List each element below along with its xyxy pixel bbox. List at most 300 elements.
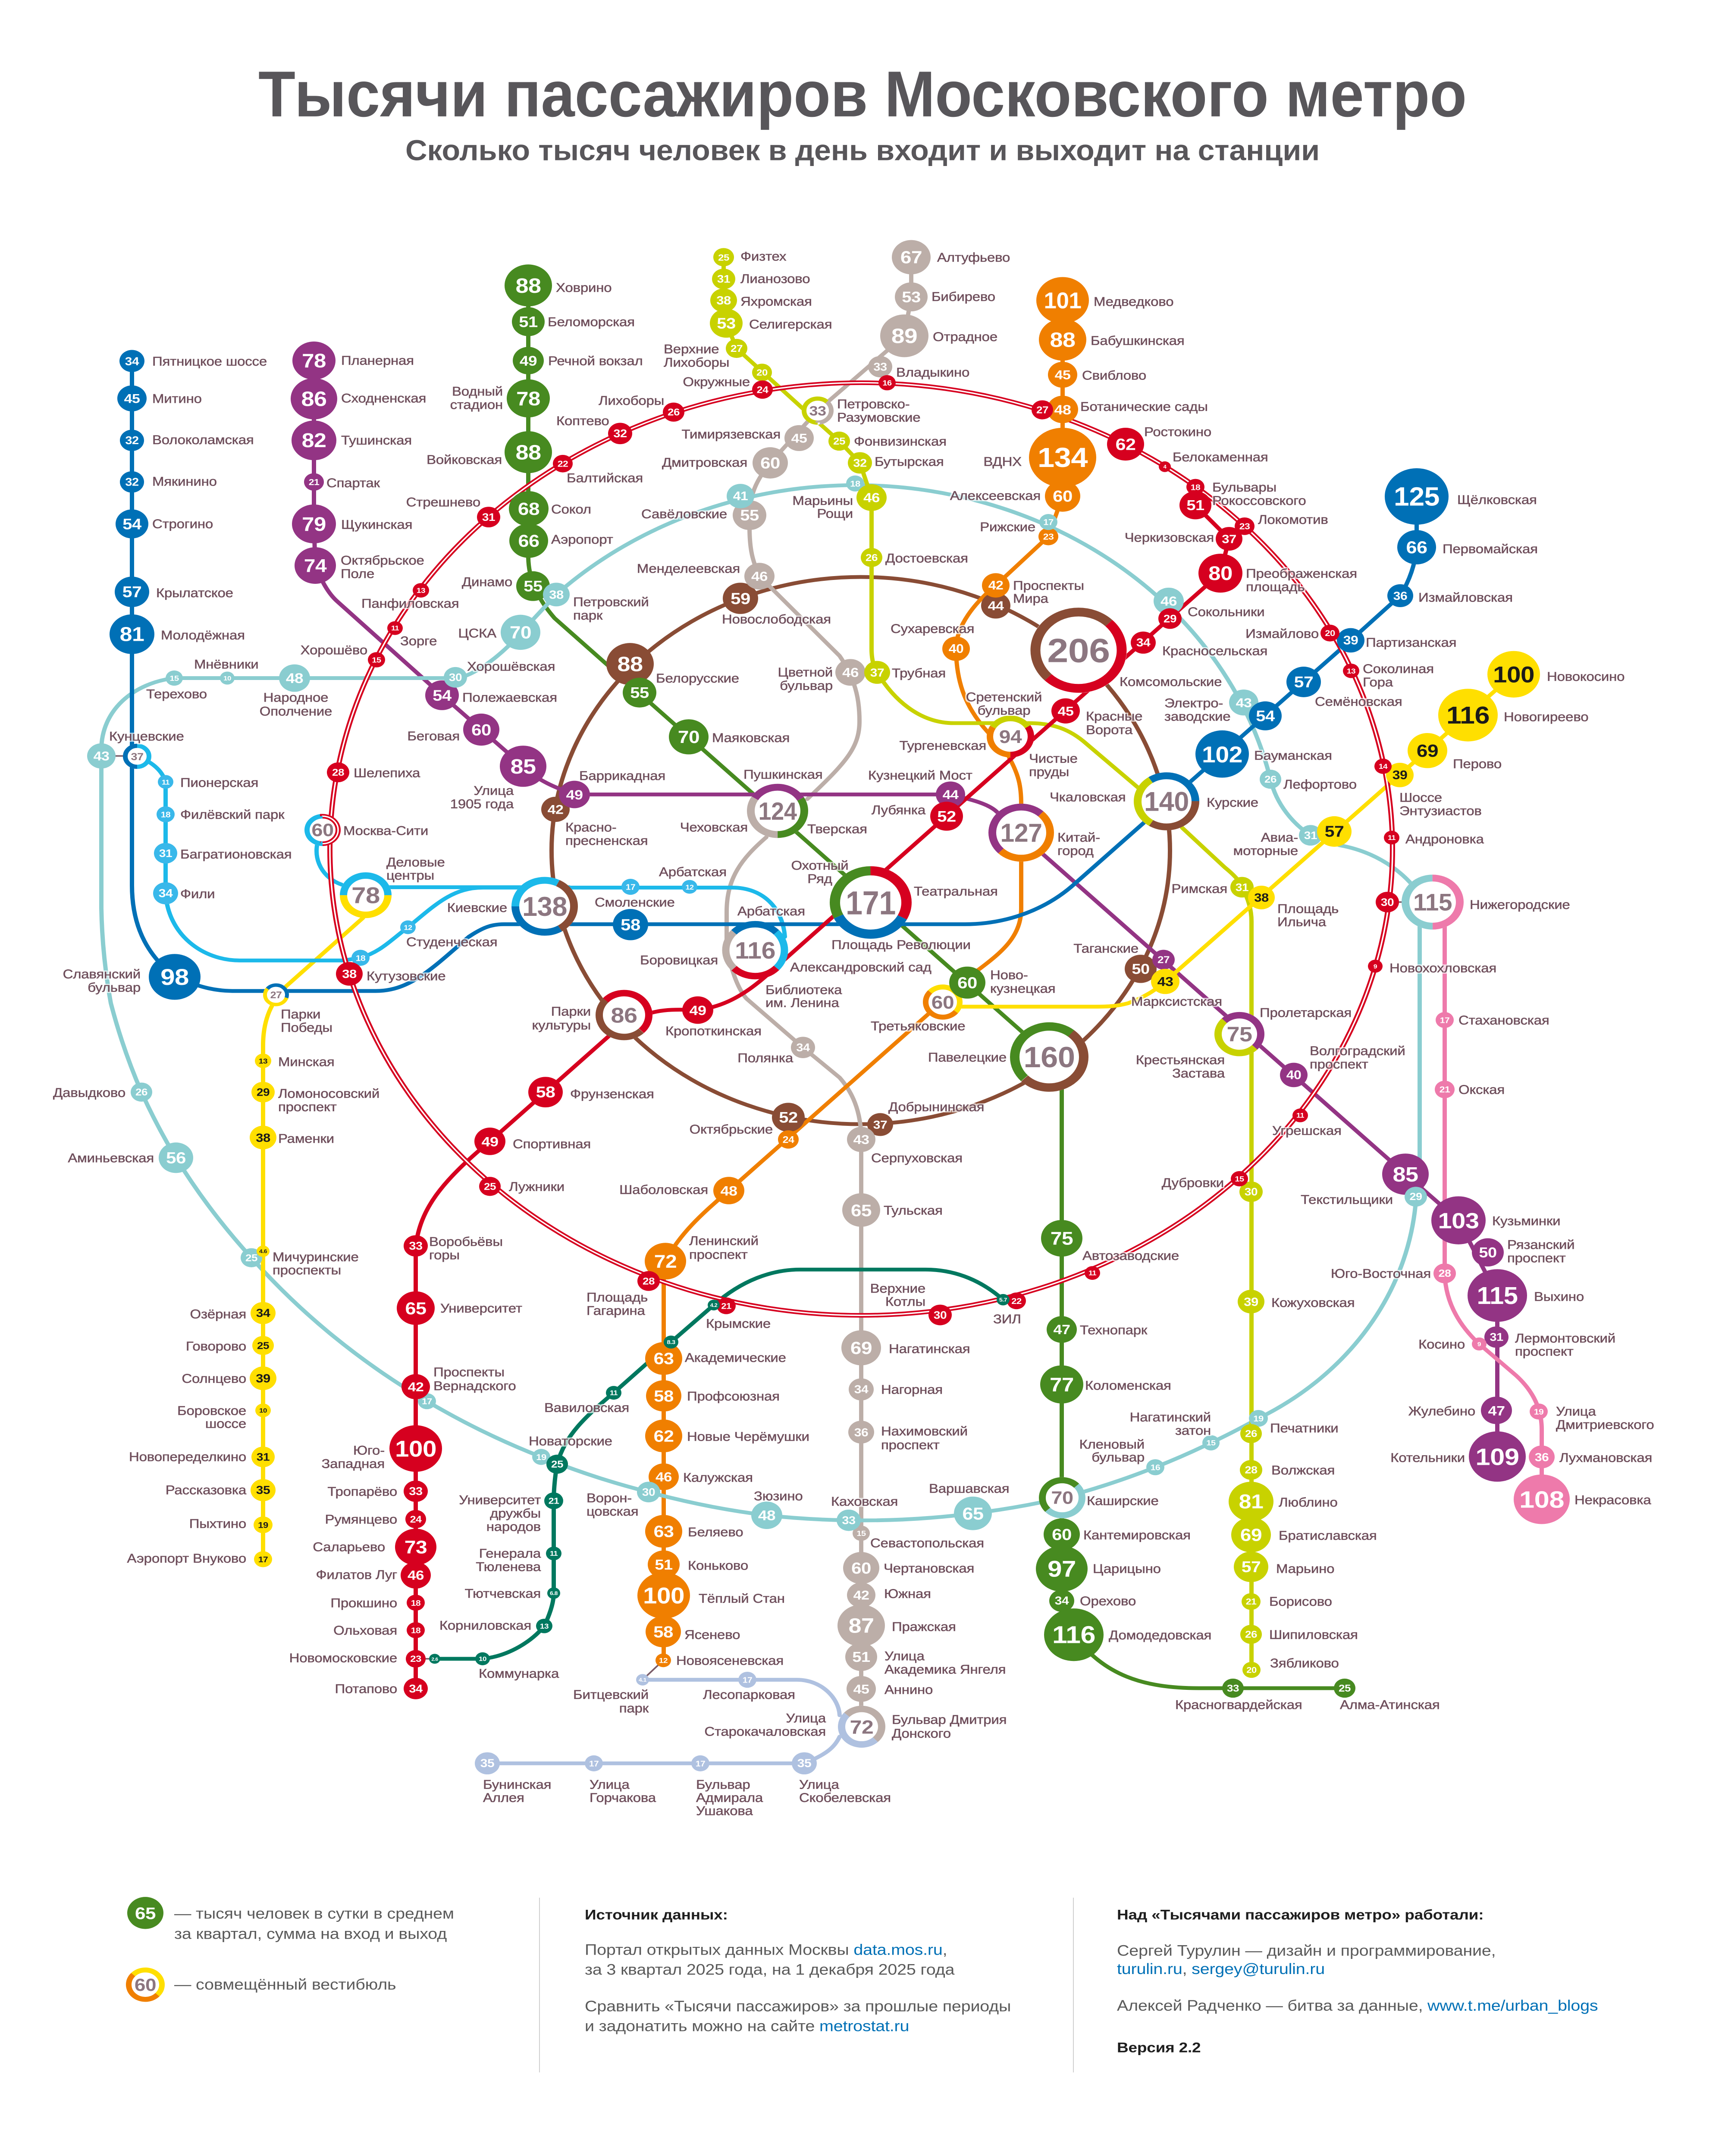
station: Арбатская Филёвская (659, 865, 727, 894)
station: Панфиловская: 13 (417, 586, 426, 595)
station: Румянцево (325, 1510, 426, 1528)
station: Рязанский проспект: проспект (1507, 1251, 1566, 1265)
station: Сухаревская: Сухаревская (891, 622, 974, 636)
station: Дубровка МЦК: 15 (1235, 1175, 1244, 1184)
station: Лермонтовский проспект: Лермонтовский (1515, 1331, 1615, 1345)
station: Генерала Тюленева (476, 1546, 561, 1574)
station: Улица Дмитриевского: Дмитриевского (1556, 1418, 1654, 1432)
station: Славянский бульвар: 98 (160, 965, 189, 990)
ring: Каширские (1039, 1477, 1159, 1518)
station: Новокосино: 100 (1493, 662, 1534, 687)
station: Потапово: Потапово (335, 1682, 397, 1696)
station: Окружная МЦК: 24 (757, 385, 768, 395)
station: Войковская: 88 (515, 441, 541, 464)
station: Бабушкинская (1039, 319, 1185, 360)
station: Перово: Перово (1453, 757, 1502, 771)
station: Нагатинский Затон: Нагатинский (1130, 1410, 1211, 1424)
station: Лефортово: Лефортово (1283, 777, 1357, 792)
station: Ясенево (646, 1616, 740, 1647)
station: Бауманская: Бауманская (1254, 749, 1332, 763)
station: Хорошёво: 15 (372, 656, 381, 664)
station: Рязанский проспект: 50 (1479, 1244, 1497, 1260)
station: Серпуховская: 43 (853, 1132, 869, 1147)
station: Бибирево (895, 282, 995, 311)
stations: Московское центральное кольцо (301, 375, 1496, 1331)
station: Окская (1435, 1081, 1505, 1098)
station: Авиамоторная БКЛ: 31 (1304, 830, 1317, 842)
station: Кузьминки (1431, 1196, 1560, 1244)
station: Ботанический сад МЦК (1032, 400, 1053, 420)
station: Люблино: Люблино (1279, 1495, 1338, 1509)
station: Академическая: 63 (654, 1349, 674, 1368)
station: Лужники: Лужники (509, 1180, 565, 1194)
station: Битцевский парк: 4.1 (639, 1677, 646, 1683)
station: Проспект Вернадского БКЛ (418, 1393, 436, 1409)
station: Котельники: 109 (1475, 1444, 1519, 1470)
station: Говорово (186, 1336, 274, 1355)
station: Цветной бульвар: Цветной (778, 665, 833, 680)
station: Аэропорт: Аэропорт (551, 533, 613, 547)
station: Вавиловская: 11 (610, 1389, 618, 1397)
station: Римская (1171, 877, 1254, 897)
station: Новокузнецкая: Ново- (990, 968, 1028, 982)
station: Корниловская: Корниловская (439, 1618, 531, 1633)
station: Алексеевская (950, 480, 1080, 512)
station: Панфиловская (361, 583, 459, 611)
station: Ломоносовский проспект (251, 1082, 380, 1114)
station: Маяковская (669, 719, 790, 755)
station: Партизанская: 39 (1343, 634, 1358, 647)
station: Народное Ополчение: 48 (286, 671, 303, 686)
station: Нахимовский проспект: 36 (854, 1426, 868, 1439)
station: Коломенская: 77 (1050, 1374, 1074, 1396)
stations: Таганско-Краснопресненская линия (291, 342, 1615, 1482)
station: Славянский бульвар (63, 954, 201, 1000)
station: Шипиловская: 26 (1245, 1630, 1257, 1640)
station: Улица Горчакова: Горчакова (590, 1791, 656, 1805)
ring: Москва-Сити: Москва-Сити (343, 824, 428, 838)
station: Смоленская Филёвская (621, 879, 640, 895)
station: Андроновка: Андроновка (1405, 832, 1484, 846)
station: Планерная: 78 (302, 350, 326, 372)
ring: Москва-Сити: 60 (311, 820, 334, 840)
line 11: Большая кольцевая (101, 485, 1420, 1520)
station: Коптево: Коптево (556, 414, 609, 428)
station: Воробьёвы горы: 33 (409, 1240, 423, 1252)
station: Владыкино: Владыкино (896, 365, 969, 379)
ring: Третьяковские: 60 (932, 992, 954, 1012)
station: Тушинская: Тушинская (341, 433, 412, 448)
ring: Китай-город: Китай- (1057, 830, 1100, 845)
station: Медведково (1036, 277, 1173, 323)
station: Кропоткинская (665, 997, 762, 1038)
station: Полежаевская: Полежаевская (462, 690, 557, 705)
interchange rings (109, 396, 1570, 1748)
station: Новокосино (1487, 651, 1625, 698)
station: Некрасовка: 108 (1519, 1487, 1564, 1513)
station: Боровское шоссе: Боровское (177, 1404, 246, 1418)
ring: Парки культуры (532, 990, 652, 1040)
station: Севастопольская: Севастопольская (870, 1536, 984, 1550)
station: Савёловская: 55 (740, 507, 759, 524)
station: Выхино: Выхино (1534, 1290, 1584, 1304)
station: Электрозаводская БКЛ: Электро- (1164, 696, 1223, 710)
station: Текстильщики БКЛ (1405, 1187, 1427, 1206)
station: Новогиреево: Новогиреево (1504, 710, 1588, 724)
station: Свиблово: 45 (1055, 367, 1070, 382)
station: Строгино (116, 509, 213, 539)
station: Молодёжная: 81 (120, 624, 144, 646)
station: Мичуринский проспект: 4.6 (259, 1248, 267, 1254)
station: Мнёвники: Мнёвники (194, 657, 258, 671)
station: Трубная: Трубная (892, 666, 946, 680)
station: Спортивная: Спортивная (513, 1137, 591, 1151)
station: Балтийская (553, 455, 643, 485)
text block: credits: Над «Тысячами пассажиров метро» работали: (1117, 1907, 1484, 1923)
station: Кожуховская: 39 (1244, 1296, 1258, 1309)
station: Текстильщики (1301, 1153, 1429, 1207)
label: Улица Старокачаловская: Улица (786, 1711, 826, 1725)
station: Потапово (335, 1678, 428, 1699)
ring: Китай-город (988, 804, 1100, 862)
station: Физтех: 25 (718, 252, 729, 263)
station: Молодёжная (110, 614, 245, 654)
station: Братиславская (1231, 1517, 1377, 1552)
station: Чертановская (843, 1552, 974, 1584)
station: Пионерская: Пионерская (180, 776, 258, 790)
station: Красные Ворота: Ворота (1086, 723, 1133, 737)
station: Улица 1905 года: Улица (474, 783, 514, 798)
station: Мичуринский проспект БКЛ: 25 (245, 1253, 257, 1263)
station: Марьина Роща: 46 (863, 490, 880, 505)
station: Лесопарковая: 17 (743, 1676, 753, 1685)
station: Белорусская зелёная: 55 (630, 685, 649, 702)
station: Шоссе Энтузиастов МЦК (1374, 758, 1392, 774)
ring: Курские: 140 (1144, 787, 1189, 817)
station: Новомосковская (289, 1650, 426, 1667)
station: Новые Черёмушки (645, 1420, 809, 1452)
station: Семёновская: 57 (1294, 674, 1313, 691)
station: Жулебино (1408, 1397, 1512, 1424)
station: Фонвизинская: Фонвизинская (854, 434, 947, 448)
ring: Кунцевские: 37 (131, 751, 144, 762)
station: Севастопольская (853, 1526, 984, 1550)
station: Беляево: 63 (654, 1522, 674, 1541)
station: Хорошёвская: 30 (449, 671, 462, 683)
station: Достоевская: 26 (866, 552, 878, 564)
station: Давыдково: 26 (135, 1087, 147, 1098)
station: Фонвизинская: 25 (833, 436, 845, 447)
line 5: Кольцевая (552, 577, 1170, 1124)
station: Сокольники БКЛ (1154, 588, 1184, 614)
station: Водный стадион (450, 379, 550, 417)
stations: Кольцевая линия (541, 583, 1157, 1137)
station: Шаболовская: Шаболовская (619, 1183, 708, 1197)
station: Калужская: Калужская (683, 1470, 753, 1485)
station: Кожуховская: Кожуховская (1271, 1296, 1355, 1310)
ring: Чистые пруды: пруды (1029, 765, 1069, 779)
station: Волжская (1240, 1460, 1335, 1480)
station: Воробьёвы горы: Воробьёвы (429, 1235, 503, 1249)
station: Окская: Окская (1458, 1083, 1505, 1097)
station: Прокшино: Прокшино (330, 1596, 397, 1610)
station: Войковская (427, 431, 552, 473)
station: Красногвардейская (1175, 1679, 1302, 1712)
station: Аннино: Аннино (884, 1683, 933, 1697)
station: Саларьево (313, 1529, 436, 1565)
ring: Курские (1050, 772, 1258, 830)
station: Котельники: Котельники (1390, 1451, 1465, 1465)
station: Пражская: 87 (848, 1614, 874, 1637)
station: Косино (1418, 1337, 1487, 1351)
station: Воронцовская: цовская (586, 1504, 638, 1519)
station: Кунцевская БКЛ: 43 (94, 749, 109, 763)
station: Угрешская (1272, 1109, 1342, 1138)
station: Алексеевская: 60 (1053, 488, 1073, 505)
station: Улица Академика Янгеля (845, 1643, 1006, 1677)
station: Яхромская (710, 288, 812, 312)
ring: Киевские: Киевские (447, 901, 507, 915)
station: Ботанические сады (1047, 396, 1208, 423)
station: Дмитровская: Дмитровская (662, 455, 747, 470)
station: Добрынинская (867, 1100, 984, 1136)
station: Алма-Атинская (1334, 1679, 1440, 1712)
station: Крылатское (115, 577, 233, 607)
station: Балтийская: Балтийская (567, 471, 643, 485)
station: Сходненская: Сходненская (341, 391, 426, 405)
station: Улица Горчакова: Улица (590, 1777, 630, 1792)
station: Коптево (556, 414, 632, 444)
station: Коптево: 32 (613, 427, 627, 440)
station: Зябликово: Зябликово (1270, 1656, 1339, 1670)
station: Лермонтовский проспект (1484, 1326, 1615, 1359)
ring: Чистые пруды: Сретенский (966, 690, 1042, 704)
station: Волгоградский проспект: 40 (1286, 1069, 1301, 1082)
ring: Деловые центры: 78 (351, 883, 380, 909)
ring: Комсомольские: 206 (1047, 632, 1110, 669)
station: Кутузовская МЦК: Кутузовские (367, 969, 445, 983)
station: Пыхтино: Пыхтино (189, 1517, 246, 1531)
station: Электрозаводская БКЛ (1164, 689, 1258, 724)
ring: Пушкинская: Тверская (807, 822, 867, 836)
station: Новослободская (722, 583, 831, 627)
ring: Крестьянская Застава: Застава (1172, 1066, 1225, 1081)
station: Краснопресненская (541, 797, 648, 848)
station: Улица Скобелевская: Скобелевская (799, 1791, 891, 1805)
line 10: Люблинско-Дмитровская (724, 257, 1251, 1670)
station: Орехово (1049, 1590, 1136, 1612)
text block: data source: Источник данных: (585, 1907, 728, 1923)
station: Волоколамская: 32 (125, 434, 139, 447)
station: Рязанский проспект (1472, 1238, 1574, 1266)
station: Саларьево: Саларьево (313, 1540, 385, 1554)
station: Лухмановская (1529, 1445, 1652, 1468)
station: Юго-Восточная: 28 (1438, 1268, 1451, 1279)
station: Вавиловская: Вавиловская (544, 1401, 629, 1415)
station: Тульская: Тульская (884, 1203, 943, 1217)
ring: Арбатская-Боровицкая: 116 (735, 937, 775, 964)
ring: Крестьянская Застава: Пролетарская (1260, 1006, 1352, 1020)
station: Таганская: Таганские (1073, 941, 1138, 956)
station: Новопеределкино (129, 1447, 275, 1467)
station: Марьино: Марьино (1276, 1562, 1334, 1576)
station: Славянский бульвар: бульвар (88, 981, 141, 995)
station: Белорусские (606, 643, 739, 686)
ring: Кунцевские (109, 729, 184, 769)
station: Ленинский проспект: проспект (689, 1247, 748, 1262)
line 12: Бутовская (487, 1680, 840, 1763)
station: Цветной бульвар (778, 659, 866, 693)
station: Смоленская Филёвская: 17 (626, 883, 636, 892)
station: Семёновская: Семёновская (1315, 695, 1402, 709)
station: Народное Ополчение: Ополчение (260, 704, 332, 718)
station: Волжская: 28 (1245, 1464, 1258, 1476)
station: Верхние Лихоборы: Верхние (664, 342, 719, 356)
station: Ховрино (505, 264, 612, 307)
station: Проспект Вернадского: 42 (408, 1379, 423, 1394)
connectors between stations (101, 756, 1406, 1680)
station: Щёлковская: 125 (1394, 482, 1440, 511)
station: Петровский парк: парк (573, 608, 603, 623)
station: Воронцовская (586, 1482, 660, 1519)
station: Окская: 21 (1440, 1084, 1450, 1094)
station: Владыкино (868, 356, 969, 379)
station: Планерная: Планерная (341, 354, 414, 368)
station: Новохохловская: Новохохловская (1389, 961, 1496, 975)
station: Динамо (462, 571, 550, 601)
station: Ленинский проспект (645, 1234, 759, 1279)
station: Кожуховская (1238, 1290, 1355, 1313)
station: Черкизовская: 37 (1222, 533, 1236, 546)
station: Терехово: 15 (169, 674, 179, 683)
ring: Пушкинская: 124 (758, 797, 797, 825)
station: Владыкино МЦК (878, 375, 896, 390)
station: Печатники БКЛ: 19 (1253, 1414, 1264, 1423)
ring: Китай-город: город (1057, 844, 1094, 858)
station: Жулебино: Жулебино (1408, 1404, 1475, 1418)
station: Локомотив (1235, 513, 1328, 535)
station: Шоссе Энтузиастов: Энтузиастов (1399, 804, 1482, 818)
ring: Деловые центры: Деловые (386, 855, 445, 869)
station: Тропарёво: 33 (409, 1485, 423, 1498)
station: Проспект Вернадского БКЛ: 17 (422, 1397, 432, 1406)
station: Локомотив: 23 (1239, 521, 1250, 531)
station: Водный стадион: 78 (516, 388, 540, 410)
station: Свиблово (1048, 362, 1146, 388)
station: Бибирево: 53 (902, 289, 921, 306)
station: Ольховая: 18 (411, 1626, 421, 1635)
ring: Деловые центры (340, 855, 445, 918)
station: Проспект Вернадского: Проспекты (433, 1365, 505, 1379)
station: Битцевский парк (573, 1674, 649, 1715)
station: Университет дружбы народов (459, 1492, 563, 1534)
station: Арбатская Филёвская: 12 (685, 884, 694, 891)
stations: Филёвская линия (153, 775, 727, 966)
station: Измайлово: 20 (1325, 629, 1335, 638)
station: Селигерская (710, 309, 832, 338)
line 4: Филёвская (137, 756, 785, 960)
station: Лужники: 25 (484, 1181, 496, 1192)
footer divider left (539, 1898, 540, 2072)
station: Академическая (645, 1342, 786, 1375)
station: Проспект Мира кольцевая (981, 592, 1010, 619)
station: Беломорская (512, 307, 635, 336)
station: Стахановская: Стахановская (1458, 1013, 1549, 1028)
station: Юго-Западная: Юго- (353, 1443, 385, 1457)
station: Краснопресненская: пресненская (565, 834, 648, 848)
station: Варшавская: Варшавская (929, 1482, 1009, 1496)
station: Лианозово (712, 269, 810, 289)
legend: circle value (127, 1897, 454, 1942)
station: Спортивная (474, 1128, 591, 1155)
station: Аминьевская (68, 1143, 193, 1173)
station: Беляево (645, 1515, 743, 1548)
station: Верхние Лихоборы: 27 (731, 343, 743, 354)
station: Кунцевская БКЛ (87, 743, 116, 768)
station: Первомайская: 66 (1406, 539, 1427, 558)
station: Шипиловская (1240, 1625, 1358, 1644)
station: Калужская: 46 (656, 1470, 672, 1485)
station: Южная: 42 (853, 1588, 869, 1602)
station: Ростокино: Ростокино (1144, 425, 1211, 439)
station: Ленинский проспект: 72 (654, 1251, 677, 1272)
line 1: Сокольническая (416, 505, 1229, 1689)
station: ВДНХ (983, 428, 1096, 487)
station: Марьино: 57 (1242, 1558, 1261, 1576)
station: Юго-Западная (321, 1425, 442, 1472)
ring: Павелецкие (928, 1022, 1088, 1092)
station: Ботанический сад МЦК: 27 (1036, 405, 1048, 416)
ring: Третьяковские (871, 984, 965, 1033)
station: Балтийская: 22 (558, 459, 568, 469)
station: ЗИЛ: ЗИЛ (993, 1312, 1021, 1326)
station: Физтех (713, 248, 787, 266)
station: Юго-Западная: Западная (321, 1457, 385, 1471)
station: Щукинская: Щукинская (341, 517, 412, 532)
ring: Петровско-Разумовские (802, 396, 920, 425)
station: Рижская оранжевая (1038, 528, 1058, 545)
stations: Люблинско-Дмитровская линия (664, 248, 1377, 1678)
station: Красносельская (1131, 632, 1267, 658)
station: Сокольники: Сокольники (1188, 605, 1265, 619)
ring: Пушкинская (680, 768, 867, 838)
station: Коммунарка: Коммунарка (479, 1667, 559, 1681)
station: Терехово: Терехово (146, 687, 207, 701)
station: Новоясеневская: Новоясеневская (676, 1654, 784, 1668)
station: Улица Академика Янгеля: Улица (884, 1649, 925, 1663)
station: Кузьминки: Кузьминки (1492, 1214, 1560, 1228)
station: Тульская (842, 1193, 943, 1227)
station: Тушинская: 82 (302, 430, 326, 451)
station: Южная (847, 1583, 931, 1608)
station: Бибирево: Бибирево (932, 290, 995, 304)
ring: Бульвар Дмитрия Донского (838, 1706, 1007, 1748)
station: Бульвар Рокоссовского: Рокоссовского (1212, 494, 1306, 508)
station: Баррикадная: 49 (566, 787, 583, 802)
station: Локомотив: Локомотив (1258, 513, 1328, 527)
station: Братиславская: Братиславская (1279, 1529, 1377, 1542)
station: Улица Академика Янгеля: 51 (852, 1649, 870, 1665)
station: Университет: 65 (405, 1299, 427, 1318)
station: Калужская (649, 1463, 753, 1490)
station: Сухаревская (891, 622, 974, 661)
station: Новопеределкино: Новопеределкино (129, 1450, 246, 1464)
station: Алма-Атинская: 25 (1339, 1683, 1351, 1694)
station: Строгино: Строгино (152, 517, 213, 531)
station: Бунинская Аллея: Бунинская (483, 1777, 551, 1792)
station: Тульская: 65 (851, 1201, 872, 1220)
ring: Арбатская-Боровицкая (640, 904, 932, 1010)
